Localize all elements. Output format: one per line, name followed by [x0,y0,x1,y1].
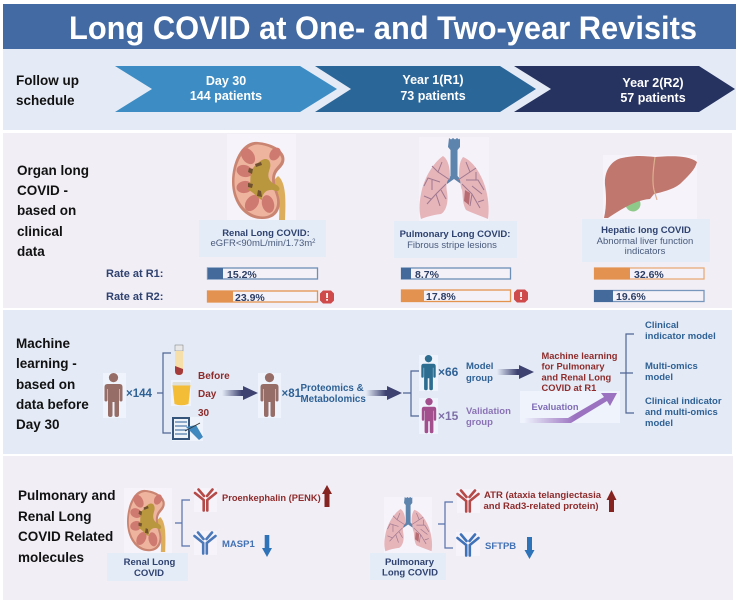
bracket: renal molecules [175,500,190,546]
text: MASP1: MASP1 [222,539,255,550]
arrow: SFTPB down [524,537,534,559]
person: 81 patients: ×81 [282,388,302,400]
caption: hepatic: Abnormal liver function [597,236,693,247]
bar: pulmonary R1 8.7% [401,268,510,281]
label: rate at R2: Rate at R2: [106,291,163,303]
bar: renal R1 15.2% [208,268,318,281]
arrow: year 1: 73 patients [400,89,466,103]
icon: clipboard [172,417,203,441]
caption: renal: Renal Long COVID: [222,228,310,239]
bracket: models [620,334,634,413]
text: before day 30: 30 [198,408,210,419]
caption: pulmonary [394,221,517,258]
bar: pulmonary R2 17.8% [401,290,510,303]
bar: renal R1 15.2%: 15.2% [227,269,257,281]
icon: antibody MASP1 [194,531,217,555]
bar: pulmonary R2 17.8%: 17.8% [426,291,456,303]
arrow: to groups [366,386,402,400]
text: before day 30: Before [198,371,230,382]
arrow: year 2 [514,66,735,112]
arrow: model to machine learning [497,365,534,379]
icon: liver [603,155,697,220]
arrow: year 2: Year 2(R2) [622,76,684,90]
heading: organ long covid: based on [17,203,76,218]
panel: machine learning [3,310,732,454]
text: ATR: ATR (ataxia telangiectasia [484,490,601,501]
arrow: PENK up [322,485,332,507]
text: clinical indicator model: Clinical [645,320,679,331]
text: multi-omics model: model [645,372,673,383]
arrow: day 30 [115,66,337,112]
heading: organ long covid: clinical [17,224,63,239]
icon: small kidney [124,488,172,553]
title banner: Long COVID at One- and Two-year Revisits [69,10,697,46]
heading: related molecules: Renal Long [18,509,92,524]
icon: antibody PENK [194,488,217,512]
arrow: evaluation: Evaluation [532,402,579,412]
icon: urine cup [171,380,191,406]
icon: alert renal [320,290,334,304]
arrow: year 2: 57 patients [620,91,686,105]
bar: hepatic R1 32.6%: 32.6% [634,269,664,281]
caption: renal long covid: COVID [134,568,164,579]
heading: machine learning: based on [16,377,75,392]
heading: related molecules: molecules [18,550,84,565]
person: 81 patients [258,373,302,418]
text: PENK: Proenkephalin (PENK) [222,493,321,503]
bar: renal R2 23.9% [208,291,318,304]
caption: pulmonary long covid: Long COVID [382,568,438,578]
label: rate at R1: Rate at R1: [106,268,163,280]
panel: organ long COVID [3,133,732,308]
text: combined model: Clinical indicator [645,396,722,407]
text: ATR: and Rad3-related protein) [484,501,599,512]
arrow: day 30: Day 30 [206,74,246,88]
caption: renal [199,220,326,257]
heading: machine learning: data before [16,397,89,412]
caption: hepatic: Hepatic long COVID [601,225,691,236]
bar: pulmonary R1 8.7%: 8.7% [415,269,440,281]
heading: organ long covid: Organ long [17,163,89,178]
text: before day 30: Day [198,389,217,400]
caption: pulmonary long covid: Pulmonary [385,557,435,568]
heading: follow up schedule: schedule [16,93,75,108]
heading: machine learning: learning - [16,356,77,371]
bar: renal R2 23.9%: 23.9% [235,292,265,304]
caption: renal: 2 [312,239,316,245]
heading: follow up schedule: Follow up [16,73,79,88]
person: validation group [419,398,459,434]
text: combined model: and multi-omics [645,407,718,418]
icon: blood tube [175,345,183,375]
person: 144 patients [103,373,153,418]
text: machine learning: COVID at R1 [542,383,596,393]
text: model group: Model [466,361,493,372]
text: machine learning: for Pulmonary [542,362,605,372]
caption: renal long covid: Renal Long [124,557,176,568]
text: machine learning: Machine learning [542,351,617,361]
caption: pulmonary long covid [370,553,446,580]
icon: kidney [227,134,296,220]
text: SFTPB: SFTPB [485,541,516,552]
caption: pulmonary: Fibrous stripe lesions [407,240,497,251]
text: validation group: group [466,417,493,428]
person: validation group: ×15 [438,409,459,423]
arrow: evaluation [520,391,620,423]
person: model group [419,355,459,391]
heading: related molecules: Pulmonary and [18,488,116,503]
arrow: year 1 [315,66,536,112]
text: machine learning: and Renal Long [542,372,612,382]
text: multi-omics model: Multi-omics [645,361,698,372]
person: model group: ×66 [438,365,459,379]
caption: renal long covid [107,553,188,581]
heading: organ long covid: data [17,244,45,259]
arrow: MASP1 down [262,535,272,557]
arrow: year 1: Year 1(R1) [402,73,464,87]
heading: related molecules: COVID Related [18,529,113,544]
icon: antibody ATR [457,489,480,513]
arrow: ATR up [606,490,616,512]
bar: hepatic R2 19.6% [594,290,704,303]
panel: related molecules [3,456,733,600]
bracket: groups [403,371,419,416]
text: combined model: model [645,418,673,429]
bracket: pulmonary molecules [438,502,453,548]
caption: hepatic: indicators [625,246,666,257]
text: validation group: Validation [466,406,511,417]
icon: antibody SFTPB [456,532,480,556]
heading: machine learning: Machine [16,336,71,351]
heading: machine learning: Day 30 [16,417,60,432]
text: proteomics and metabolomics: Proteomics & [300,383,364,394]
icon: alert pulmonary [514,290,528,302]
panel: follow up schedule [3,49,736,130]
text: clinical indicator model: indicator model [645,331,716,342]
icon: small lungs [384,497,432,553]
bar: hepatic R1 32.6% [594,268,704,281]
bracket: samples [157,353,171,433]
arrow: day 30: 144 patients [190,89,262,103]
text: model group: group [466,373,493,384]
text: proteomics and metabolomics: Metabolomics [300,394,366,405]
bar: hepatic R2 19.6%: 19.6% [616,291,646,303]
caption: renal: eGFR<90mL/min/1.73m [211,238,312,249]
arrow: to proteomics [222,386,258,400]
heading: organ long covid: COVID - [17,183,68,198]
caption: hepatic [582,219,710,262]
person: 144 patients: ×144 [126,388,153,400]
icon: lungs [419,137,489,221]
caption: pulmonary: Pulmonary Long COVID: [400,229,510,240]
